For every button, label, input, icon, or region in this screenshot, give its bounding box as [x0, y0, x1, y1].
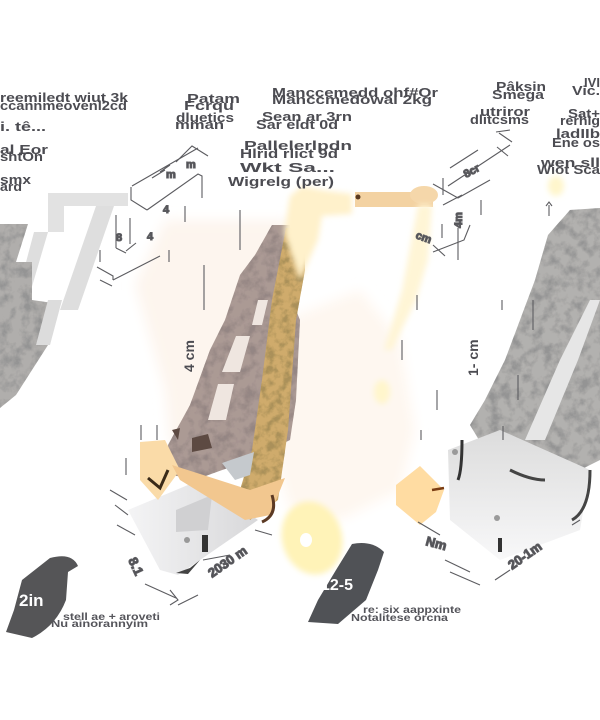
caption right — [351, 605, 462, 624]
dimension lines over center — [126, 202, 552, 475]
dimension box left: 8 — [116, 232, 122, 244]
text block top left: i. tê... — [0, 119, 46, 134]
bottom dimension right — [418, 520, 580, 585]
text block centre: Wkt Sa... — [240, 160, 335, 175]
text block top left: smx — [0, 172, 32, 187]
dimension box right: 4m — [453, 212, 465, 228]
dimension box left: m — [166, 169, 176, 181]
badge: 24m: 12-5 — [321, 577, 353, 594]
dimension box right: 8cr — [462, 162, 483, 181]
caption right: Notalitese orcna — [351, 613, 449, 624]
text block upper right: Pâksin — [496, 79, 546, 94]
text block centre — [228, 85, 438, 189]
height label: 4 — [163, 204, 170, 216]
text block upper right: utriror — [480, 104, 530, 119]
text block upper right: Smega — [492, 87, 545, 102]
text block far right: wen sll — [540, 155, 600, 170]
text block far right: ladIIb — [556, 126, 600, 141]
handle rail — [355, 192, 433, 207]
vertical label left: 4 cm — [181, 340, 197, 372]
yellow wheel and base — [140, 440, 444, 582]
grey handle — [48, 193, 128, 232]
bottom dimension right: 20-1m — [505, 539, 545, 572]
text block centre: Manccmedowal 2kg — [272, 92, 432, 107]
text block far right — [537, 75, 600, 177]
text block upper right: dlitcsms — [470, 112, 529, 127]
text block far right: IVI — [584, 75, 600, 90]
caption right: re: six aappxinte — [363, 605, 462, 616]
left walker (grey) — [0, 193, 128, 408]
text block far right: Wiot Sca — [537, 162, 600, 177]
soft cream body right — [270, 290, 415, 520]
left rear wheel — [140, 440, 180, 500]
text block centre: Sar eldt 0d — [256, 117, 338, 132]
bottom dimension left: 2030 m — [205, 543, 250, 580]
bottom dimension left — [110, 490, 272, 605]
grey frame bars — [16, 206, 114, 310]
dimension box left: 4 — [147, 231, 154, 243]
badge: 2 in 1: 2in — [19, 591, 44, 610]
text block upper centre: mman — [175, 117, 224, 132]
yellow glint — [548, 176, 564, 196]
soft cream body left — [135, 220, 290, 445]
badge: 24m — [308, 543, 384, 624]
dark folds on bear — [172, 428, 212, 452]
text block top left: al Eor — [0, 142, 48, 157]
front wheel — [273, 494, 351, 582]
left walker base (grey) — [128, 480, 258, 575]
text block top left: ccannmeovenl2cd — [0, 98, 127, 113]
text block centre: Manccemedd ohf#Or — [272, 85, 438, 100]
right plush toy (grey) — [470, 208, 600, 480]
text block centre: Wigrelg (per) — [228, 174, 334, 189]
text block top left — [0, 90, 129, 194]
text block upper centre: Patam — [187, 91, 240, 106]
text block far right: Vic. — [572, 83, 600, 98]
grey fur toy — [0, 224, 60, 408]
caption left: Nu ainorannyim — [51, 619, 148, 630]
text block centre: Pallelerlpdn — [244, 138, 352, 153]
text block upper centre: Fcrqu — [184, 98, 234, 113]
text block top left: ard — [0, 179, 22, 194]
text block far right: Sat+ — [568, 106, 600, 121]
text block upper centre: dluetics — [176, 110, 234, 125]
dimension box left — [97, 146, 208, 286]
wooden cross bar — [172, 465, 285, 520]
text block upper right — [470, 79, 546, 127]
right orange foot — [396, 466, 444, 525]
text block centre: Hlrid rlict 9d — [240, 146, 338, 161]
right walker frame strips over plush — [525, 300, 600, 440]
text block upper centre — [175, 91, 240, 132]
dimension box right: cm — [414, 230, 433, 246]
text block top left: shtOn — [0, 149, 43, 164]
caption left: stell ae + aroveti — [63, 612, 160, 623]
bottom dimension left: 8.1 — [125, 555, 147, 578]
wooden handle (yellow) — [284, 186, 438, 404]
text block centre: Sean ar 3rn — [262, 109, 352, 124]
bottom dimension right: Nm — [424, 533, 448, 553]
caption left — [51, 612, 160, 630]
vertical label right: 1- cm — [465, 339, 481, 376]
right walker base (grey) — [448, 430, 590, 560]
dark rim segments — [262, 495, 274, 522]
pale highlights on bear — [208, 300, 268, 420]
badge: 2 in 1 — [6, 556, 78, 638]
text block far right: Ene os — [552, 135, 600, 150]
dimension box left: m — [186, 159, 196, 171]
text block far right: rerhlg — [560, 113, 600, 128]
text block top left: reemiledt wiut 3k — [0, 90, 129, 105]
brown plush bear — [165, 225, 300, 478]
dimension box right — [414, 130, 512, 256]
golden fur strip — [240, 228, 305, 520]
right upright — [384, 205, 432, 350]
